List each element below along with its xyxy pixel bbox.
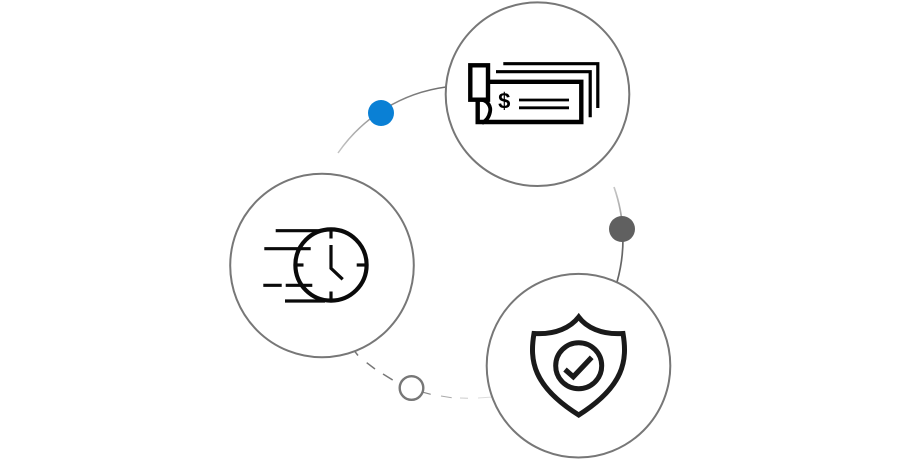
dot: dark gray xyxy=(609,216,635,242)
dot: white ring xyxy=(400,376,423,400)
arc: right connector from cheques to shield xyxy=(614,187,623,282)
arc: upper connector from clock to cheques xyxy=(338,87,446,153)
icon: stack of cheques xyxy=(470,64,598,123)
arc: dashed lower connector from shield to clock xyxy=(355,352,493,398)
panel: clock circle xyxy=(230,174,414,357)
dot: blue xyxy=(368,100,394,126)
text: dollar sign: $ xyxy=(498,88,510,114)
icon: shield with check mark xyxy=(532,317,625,415)
panel: cheques circle xyxy=(446,2,629,186)
panel: shield circle xyxy=(487,274,670,458)
icon: fast clock with speed lines xyxy=(263,229,367,301)
